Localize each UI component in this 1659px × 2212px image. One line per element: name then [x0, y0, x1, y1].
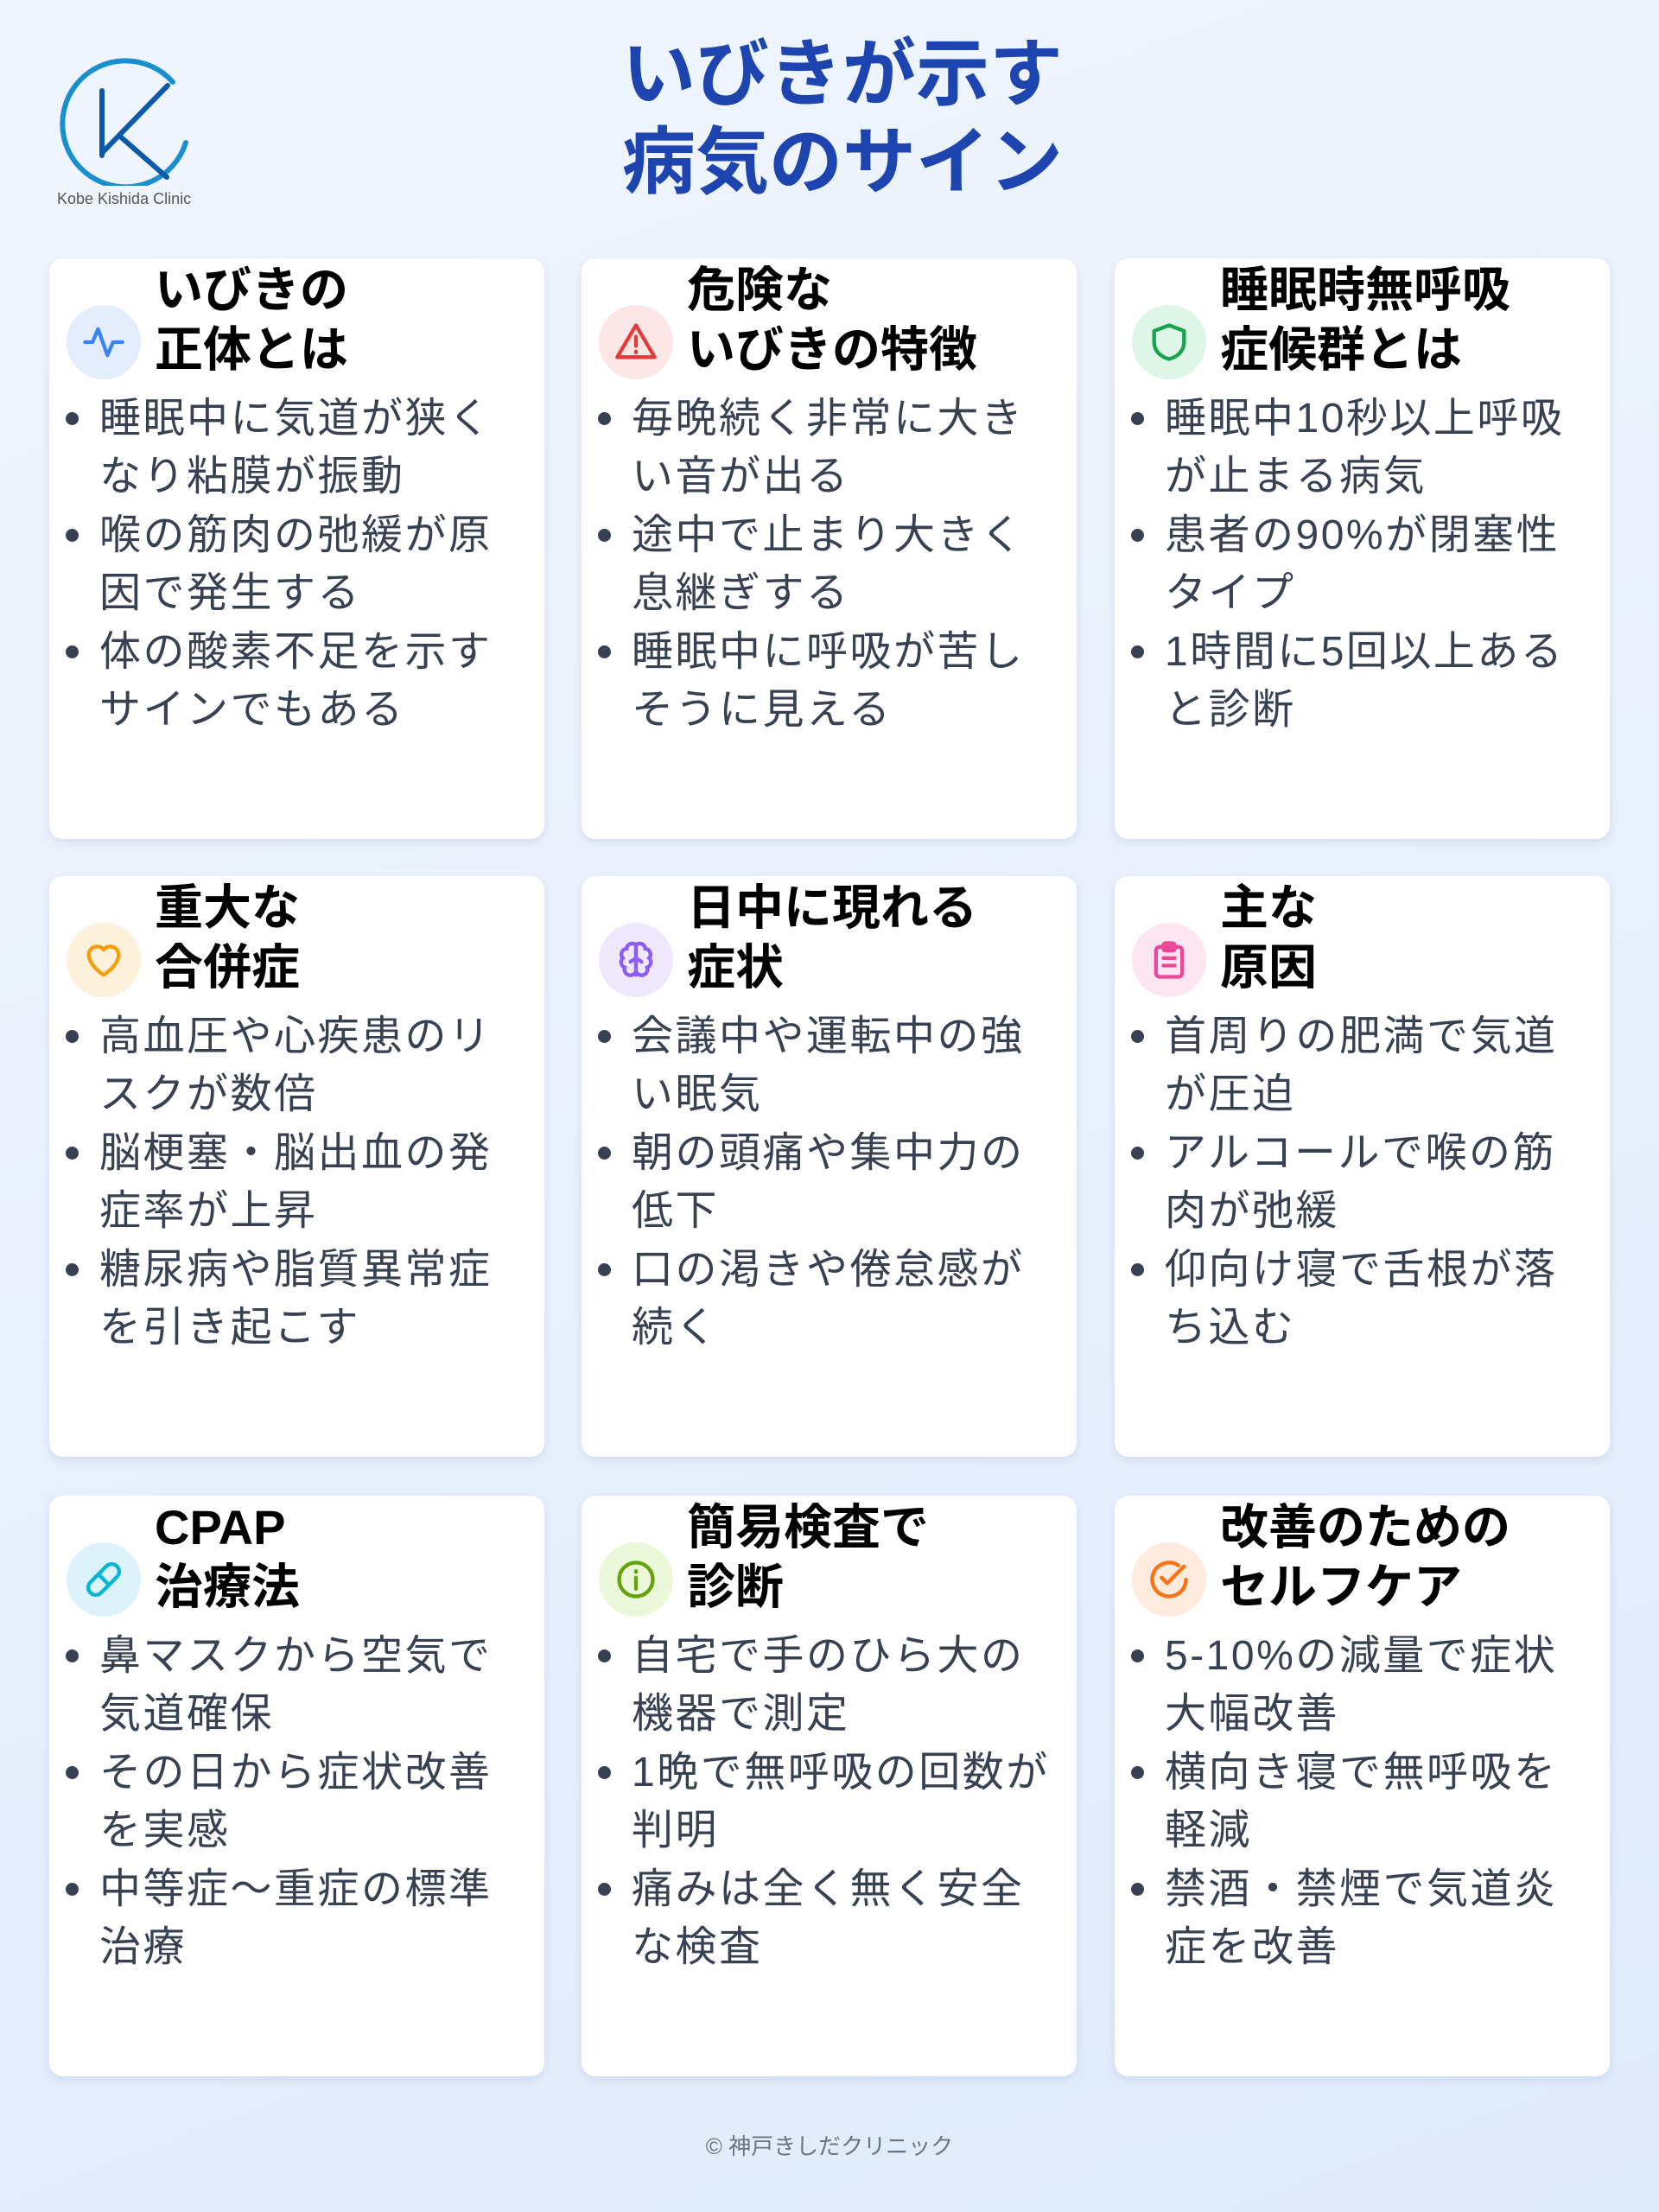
title: いびきが示す [622, 34, 1063, 116]
panel: 主な原因: 仰向け寝で舌根が落 [1165, 1247, 1558, 1293]
panel: 簡易検査で診断: 1晩で無呼吸の回数が [632, 1750, 1050, 1796]
panel: いびきの正体とは: サインでもある [99, 687, 405, 733]
panel: CPAP治療法: 治療 [99, 1924, 187, 1970]
panel: 日中に現れる症状: 症状 [687, 940, 784, 995]
panel: 主な原因: 原因 [1220, 940, 1317, 995]
panel: 睡眠時無呼吸症候群とは: と診断 [1165, 687, 1296, 733]
panel: 改善のためのセルフケア: セルフケア [1220, 1560, 1462, 1614]
panel: 危険ないびきの特徴: 途中で止まり大きく [632, 512, 1025, 558]
panel: 重大な合併症 [49, 876, 544, 1457]
panel: 危険ないびきの特徴: いびきの特徴 [687, 322, 977, 377]
panel: 日中に現れる症状: 会議中や運転中の強 [632, 1014, 1025, 1059]
panel: 日中に現れる症状: 低下 [632, 1188, 719, 1234]
panel: いびきの正体とは: 睡眠中に気道が狭く [99, 396, 493, 442]
panel: 主な原因: 肉が弛緩 [1165, 1188, 1339, 1234]
panel: 改善のためのセルフケア: 大幅改善 [1165, 1691, 1339, 1737]
panel: 日中に現れる症状: 口の渇きや倦怠感が [632, 1247, 1025, 1293]
panel: 睡眠時無呼吸症候群とは: 睡眠中10秒以上呼吸 [1165, 396, 1564, 442]
panel: 睡眠時無呼吸症候群とは: 症候群とは [1220, 322, 1462, 377]
title: 病気のサイン [622, 122, 1063, 204]
panel: 改善のためのセルフケア: 症を改善 [1165, 1924, 1339, 1970]
panel: 簡易検査で診断: 機器で測定 [632, 1691, 850, 1737]
panel: いびきの正体とは: 正体とは [155, 322, 348, 377]
panel: 重大な合併症: 症率が上昇 [99, 1188, 318, 1234]
panel: CPAP治療法: その日から症状改善 [99, 1750, 493, 1796]
panel: CPAP治療法: CPAP [155, 1500, 285, 1554]
panel: 改善のためのセルフケア: 5-10%の減量で症状 [1165, 1633, 1557, 1679]
panel: 主な原因: アルコールで喉の筋 [1165, 1130, 1556, 1176]
panel: 危険ないびきの特徴: 睡眠中に呼吸が苦し [632, 629, 1025, 675]
panel: CPAP治療法: 中等症～重症の標準 [99, 1866, 493, 1912]
panel: CPAP治療法 [49, 1496, 544, 2076]
panel: 危険ないびきの特徴 [582, 258, 1077, 839]
panel: 日中に現れる症状: い眠気 [632, 1071, 763, 1117]
panel: 改善のためのセルフケア: 禁酒・禁煙で気道炎 [1165, 1866, 1558, 1912]
panel: 睡眠時無呼吸症候群とは: 1時間に5回以上ある [1165, 629, 1564, 675]
panel: CPAP治療法: を実感 [99, 1808, 231, 1853]
panel: 睡眠時無呼吸症候群とは [1115, 258, 1610, 839]
panel: 重大な合併症: 合併症 [155, 940, 300, 995]
panel: 主な原因: 首周りの肥満で気道 [1165, 1014, 1558, 1059]
panel: 日中に現れる症状: 朝の頭痛や集中力の [632, 1130, 1025, 1176]
panel: 主な原因: が圧迫 [1165, 1071, 1296, 1117]
panel: 睡眠時無呼吸症候群とは: タイプ [1165, 570, 1296, 616]
panel: CPAP治療法: 気道確保 [99, 1691, 274, 1737]
panel: 改善のためのセルフケア: 軽減 [1165, 1808, 1252, 1853]
panel: 改善のためのセルフケア: 改善のための [1220, 1500, 1510, 1554]
panel: CPAP治療法: 鼻マスクから空気で [99, 1633, 493, 1679]
panel: いびきの正体とは: 因で発生する [99, 570, 361, 616]
panel: 危険ないびきの特徴: い音が出る [632, 454, 850, 499]
panel: 主な原因: 主な [1220, 880, 1317, 935]
panel: 危険ないびきの特徴: 危険な [687, 263, 832, 317]
panel: 重大な合併症: スクが数倍 [99, 1071, 318, 1117]
panel: 簡易検査で診断: 簡易検査で [687, 1500, 929, 1554]
panel: 重大な合併症: 高血圧や心疾患のリ [99, 1014, 493, 1059]
footer: © 神戸きしだクリニック [706, 2133, 953, 2159]
panel: 改善のためのセルフケア [1115, 1496, 1610, 2076]
logo [57, 58, 191, 207]
panel: 簡易検査で診断: 診断 [687, 1560, 784, 1614]
panel: 簡易検査で診断: 判明 [632, 1808, 719, 1853]
panel: 睡眠時無呼吸症候群とは: が止まる病気 [1165, 454, 1427, 499]
panel: 日中に現れる症状 [582, 876, 1077, 1457]
panel: 危険ないびきの特徴: 毎晩続く非常に大き [632, 396, 1025, 442]
title [622, 34, 1063, 204]
panel: CPAP治療法: 治療法 [155, 1560, 300, 1614]
panel: 睡眠時無呼吸症候群とは: 睡眠時無呼吸 [1220, 263, 1510, 317]
panel: 日中に現れる症状: 続く [632, 1305, 719, 1351]
panel: 危険ないびきの特徴: そうに見える [632, 687, 893, 733]
panel: 簡易検査で診断: 自宅で手のひら大の [632, 1633, 1025, 1679]
panel: いびきの正体とは: なり粘膜が振動 [99, 454, 405, 499]
panel: いびきの正体とは: いびきの [155, 263, 348, 317]
panel: 簡易検査で診断: 痛みは全く無く安全 [632, 1866, 1025, 1912]
panel: 重大な合併症: 脳梗塞・脳出血の発 [99, 1130, 493, 1176]
panel: 睡眠時無呼吸症候群とは: 患者の90%が閉塞性 [1165, 512, 1560, 558]
panel: 重大な合併症: 糖尿病や脂質異常症 [99, 1247, 493, 1293]
panel: いびきの正体とは: 喉の筋肉の弛緩が原 [99, 512, 493, 558]
panel: 改善のためのセルフケア: 横向き寝で無呼吸を [1165, 1750, 1558, 1796]
panel: 簡易検査で診断 [582, 1496, 1077, 2076]
panel: 主な原因: ち込む [1165, 1305, 1296, 1351]
panel: 危険ないびきの特徴: 息継ぎする [632, 570, 850, 616]
panel: いびきの正体とは [49, 258, 544, 839]
panel: いびきの正体とは: 体の酸素不足を示す [99, 629, 493, 675]
panel: 簡易検査で診断: な検査 [632, 1924, 763, 1970]
panel: 主な原因 [1115, 876, 1610, 1457]
panel: 重大な合併症: を引き起こす [99, 1305, 360, 1351]
panel: 重大な合併症: 重大な [155, 880, 300, 935]
logo: Kobe Kishida Clinic [57, 190, 191, 207]
panel: 日中に現れる症状: 日中に現れる [687, 880, 977, 935]
